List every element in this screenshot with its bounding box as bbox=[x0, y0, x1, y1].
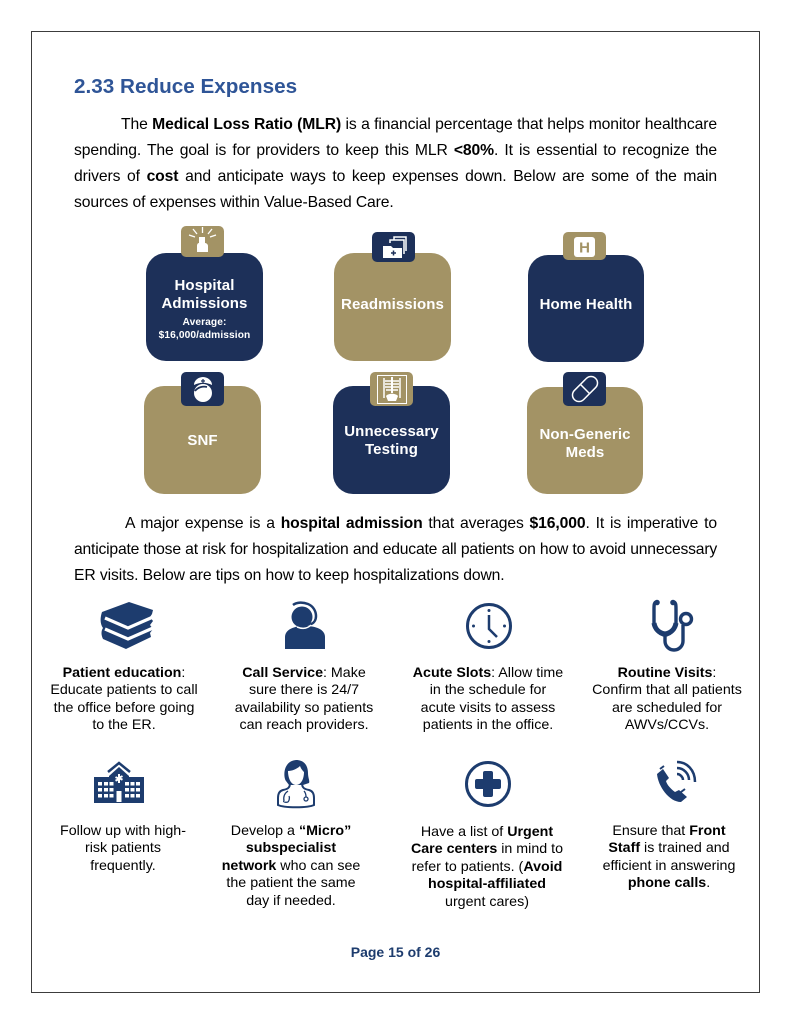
icon: stethoscope bbox=[652, 600, 694, 652]
text: follow up: Follow up with high- bbox=[60, 823, 186, 839]
text: micro network: Develop a “Micro” bbox=[231, 823, 351, 839]
text: front staff: efficient in answering bbox=[603, 858, 735, 874]
panel: hospital admissions: Admissions bbox=[161, 295, 248, 312]
icon: clock bbox=[466, 603, 512, 649]
text block: MLR intro: spending. The goal is for providers to keep this MLR <80%. It is essential to recognize the bbox=[74, 142, 717, 159]
text: acute slots: patients in the office. bbox=[423, 717, 553, 733]
icon: medical cross bbox=[465, 761, 511, 807]
panel: hospital admissions bbox=[146, 226, 263, 361]
text: micro network: the patient the same bbox=[226, 875, 356, 891]
text: micro network: network who can see bbox=[222, 858, 360, 874]
text: micro network: subspecialist bbox=[246, 840, 336, 856]
text: urgent care: refer to patients. (Avoid bbox=[412, 859, 562, 875]
text block: hospital admission: A major expense is a hospital admission that averages $16,000. It is imperative to bbox=[125, 515, 717, 532]
text block: MLR intro bbox=[74, 116, 717, 211]
panel: non-generic meds bbox=[527, 372, 643, 494]
text: patient education: the office before going bbox=[54, 700, 194, 716]
text: urgent care: Have a list of Urgent bbox=[421, 824, 553, 840]
text: urgent care bbox=[411, 824, 563, 910]
icon: phone bbox=[657, 760, 696, 802]
text: front staff: phone calls. bbox=[628, 875, 710, 891]
text: acute slots: in the schedule for bbox=[430, 682, 546, 698]
text: routine visits: Routine Visits: bbox=[618, 665, 716, 681]
heading: 2.33 Reduce Expenses bbox=[74, 75, 297, 98]
text: call service: availability so patients bbox=[235, 700, 373, 716]
text: micro network bbox=[222, 823, 360, 909]
text: routine visits: Confirm that all patients bbox=[592, 682, 742, 698]
text block: MLR intro: sources of expenses within Value-Based Care. bbox=[74, 194, 394, 211]
text: call service: sure there is 24/7 bbox=[249, 682, 359, 698]
text: call service: Call Service: Make bbox=[242, 665, 366, 681]
text block: hospital admission: ER visits. Below are tips on how to keep hospitalizations down. bbox=[74, 567, 505, 584]
text: front staff bbox=[603, 823, 735, 891]
text: acute slots: Acute Slots: Allow time bbox=[413, 665, 563, 681]
text: routine visits: AWVs/CCVs. bbox=[625, 717, 709, 733]
text: patient education bbox=[50, 665, 198, 733]
panel: home health: Home Health bbox=[540, 296, 632, 313]
text block: hospital admission bbox=[74, 515, 718, 584]
panel: home health bbox=[528, 232, 644, 362]
text: follow up bbox=[60, 823, 186, 874]
icon: hospital bbox=[94, 762, 144, 803]
text: routine visits bbox=[592, 665, 742, 733]
text: patient education: Educate patients to call bbox=[50, 682, 198, 698]
text: micro network: day if needed. bbox=[246, 893, 336, 909]
page number: Page 15 of 26 bbox=[351, 944, 440, 960]
panel: hospital admissions: Hospital bbox=[174, 277, 234, 294]
panel: hospital admissions: $16,000/admission bbox=[159, 330, 250, 340]
panel: hospital admissions: Average: bbox=[182, 317, 227, 328]
panel: SNF: SNF bbox=[187, 432, 218, 449]
text block: MLR intro: drivers of cost and anticipate ways to keep expenses down. Below are some of the main bbox=[74, 168, 717, 185]
text: urgent care: Care centers in mind to bbox=[411, 841, 563, 857]
text: patient education: to the ER. bbox=[92, 717, 156, 733]
text: acute slots bbox=[413, 665, 563, 733]
text: call service bbox=[235, 665, 373, 733]
icon: doctor bbox=[277, 760, 315, 808]
panel: non-generic meds: Non-Generic bbox=[539, 426, 631, 443]
text: follow up: risk patients bbox=[85, 840, 161, 856]
text: patient education: Patient education: bbox=[63, 665, 185, 681]
panel: non-generic meds: Meds bbox=[566, 444, 604, 461]
panel: unnecessary testing bbox=[333, 372, 450, 494]
text: routine visits: are scheduled for bbox=[612, 700, 722, 716]
text block: hospital admission: anticipate those at risk for hospitalization and educate all patients on how to avoid unnecessary bbox=[74, 541, 717, 558]
panel: readmissions: Readmissions bbox=[341, 296, 444, 313]
text: urgent care: hospital-affiliated bbox=[428, 876, 546, 892]
icon: books bbox=[100, 602, 153, 649]
panel: unnecessary testing: Testing bbox=[365, 441, 418, 458]
panel: readmissions bbox=[334, 232, 451, 361]
panel: SNF bbox=[144, 372, 261, 494]
text: urgent care: urgent cares) bbox=[445, 894, 529, 910]
panel: home health: H bbox=[579, 240, 590, 256]
panel: unnecessary testing: Unnecessary bbox=[344, 423, 439, 440]
text: acute slots: acute visits to assess bbox=[421, 700, 555, 716]
text: call service: can reach providers. bbox=[239, 717, 369, 733]
text: front staff: Staff is trained and bbox=[608, 840, 730, 856]
text: front staff: Ensure that Front bbox=[612, 823, 726, 839]
text: follow up: frequently. bbox=[90, 858, 156, 874]
text block: MLR intro: The Medical Loss Ratio (MLR) is a financial percentage that helps monitor healthcare bbox=[121, 116, 717, 133]
icon: call service bbox=[285, 601, 325, 649]
